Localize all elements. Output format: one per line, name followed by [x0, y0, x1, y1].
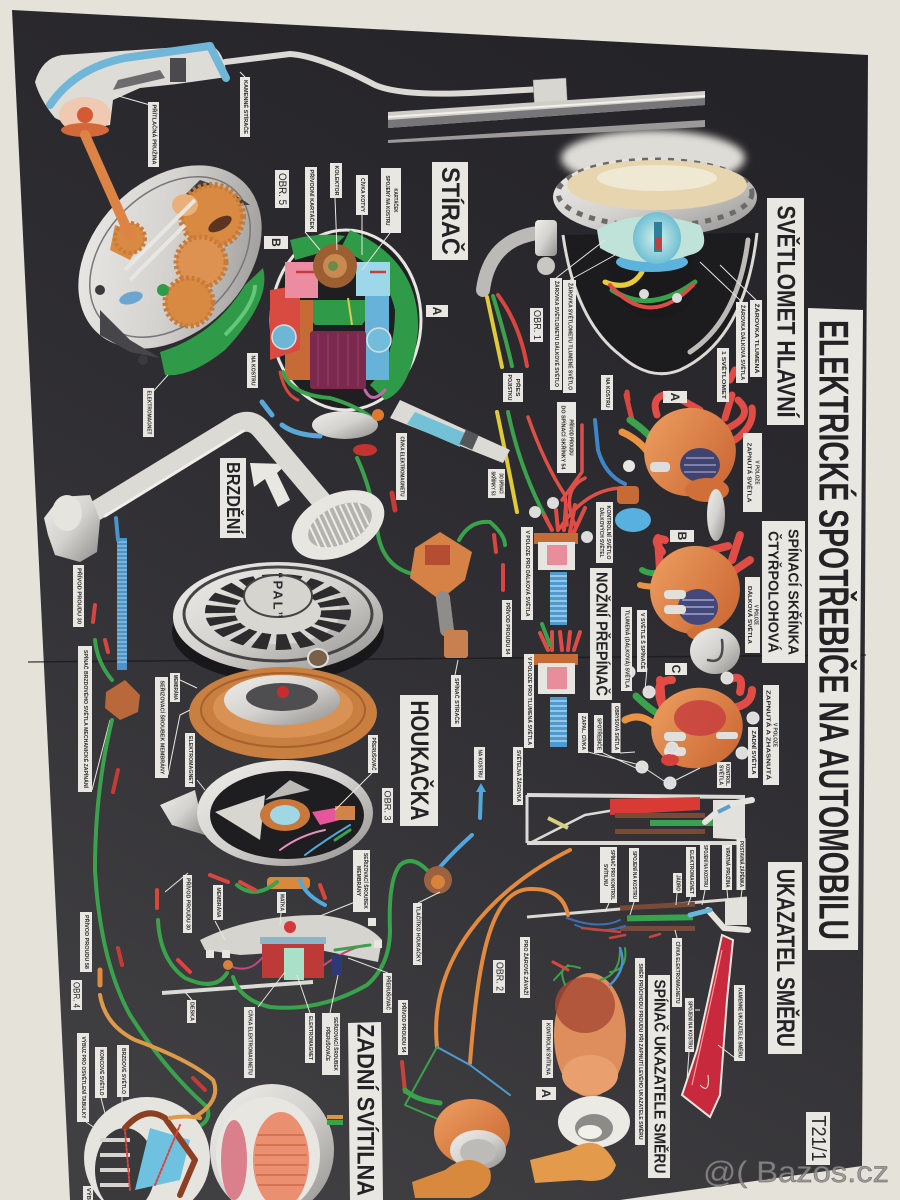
label: přívod proudu [557, 402, 576, 473]
label: tlumená: TLUMENÁ (DÁLKOVÁ) SVĚTLA [624, 610, 632, 688]
label: přívod proudu 58 [80, 912, 92, 972]
heading: ukazatel směru: UKAZATEL SMĚRU [771, 869, 801, 1047]
wiper blade and rod [225, 54, 705, 143]
horn cover: “PAL” [270, 572, 286, 620]
label: obr 4: OBR. 4 [72, 982, 82, 1008]
heading: houkačka [400, 695, 438, 826]
label: přívod proudu: DO SPÍNACÍ SKŘÍNKY 54 [560, 406, 568, 470]
label: matka: MATKA [278, 894, 284, 911]
heading: stírač: STÍRAČ [436, 167, 466, 255]
label: přívod proudu 54: PŘÍVOD PROUDU 54 [504, 602, 512, 655]
label: kontrolní světlo dálkových světel: DÁLKOVÝCH SVĚTEL [598, 508, 606, 558]
label: na kostru: NA KOSTRU [604, 378, 610, 408]
label: koncové světlo: KONCOVÉ SVĚTLO [98, 1050, 106, 1096]
label: přívod proudu 54 [502, 600, 512, 657]
label: seřizovací šroubek 2: SEŘIZOVACÍ ŠROUBEK [362, 853, 370, 909]
label: tlumená [621, 607, 632, 691]
label: spotřebiče: SPOTŘEBIČE [596, 718, 604, 750]
label: spotřebiče [594, 715, 604, 753]
label: přívod proudu 30: PŘÍVOD PROUDU 30 [76, 568, 84, 624]
indicator lower view [527, 898, 748, 938]
label: v poloze pro dálková světla [521, 527, 533, 620]
label: cívka elektromagnetu: CÍVKA ELEKTROMAGNETU [398, 436, 406, 496]
label: v poloze zapnutá [763, 685, 779, 785]
panel: four-position switch box [578, 300, 805, 789]
horn cover [172, 562, 384, 682]
label: žárovka dálková [550, 278, 562, 390]
motor B gearbox [42, 129, 298, 385]
label: tag A [426, 305, 448, 317]
label: spojení na kostru 2 [629, 848, 639, 902]
heading: spínač ukazatele směru [648, 975, 670, 1178]
label: spínač pro kontrolní svítilnu: SVÍTILNU [602, 864, 610, 886]
label: koncové světlo [95, 1047, 107, 1098]
label: směr průchodu proudu [635, 958, 645, 1145]
label: spojení na kostru 3 [685, 998, 694, 1052]
label: kolektor [330, 163, 342, 198]
label: do spínací skříňky: DO SPÍNACÍ [498, 474, 506, 494]
label: cívka elektromagnetu 2 [244, 1007, 255, 1078]
label: na kostru: NA KOSTRU [250, 356, 256, 386]
label: vrtání závaží: PRO ŽÁROVÉ ZÁVAŽÍ [522, 940, 530, 995]
watermark: @( Bazos.cz [703, 1156, 889, 1189]
label: matka [277, 892, 286, 913]
label: směr průchodu proudu: SMĚR PRŮCHODU PROUDU PŘI ZAPNUTÍ LEVÉHO UKAZATELE SMĚRU [637, 964, 645, 1140]
label: switch C tag: C [669, 665, 683, 674]
label: přes pojistku: POJISTKU [506, 374, 512, 400]
label: spínač stírače: SPÍNAČ STÍRAČE [453, 678, 461, 724]
switch callouts [588, 666, 759, 789]
label: tag A: A [430, 307, 444, 316]
label: výbuz pro osvětlení tabulky: VÝBUZ PRO OSVĚTLENÍ TABULKY [80, 1036, 88, 1119]
label: přítlačná pružina [148, 102, 159, 167]
label: kamenné ukazatele směru: KAMENNÉ UKAZATELE SMĚRU [736, 988, 744, 1058]
label: membrána 2 [213, 885, 223, 920]
switch lower [529, 497, 593, 747]
label: přívod proudu: PŘÍVOD PROUDU [568, 420, 576, 456]
panel: direction indicator switch [402, 850, 670, 1198]
rear lamp open view [84, 1097, 210, 1200]
label: membrána: MEMBRÁNA [172, 675, 179, 700]
spring and brake switch [93, 518, 140, 720]
label: seřizovací šroubek membrány [155, 677, 168, 778]
label: spojení na kostru 3: SPOJENÍ NA KOSTRU [686, 1001, 694, 1049]
heading: spínací skříňka [762, 521, 805, 663]
label: na kostru [474, 747, 485, 780]
switch A [622, 370, 752, 541]
label: kontrolní světlo dálkových světel: KONTROLNÍ SVĚTLO [605, 506, 613, 560]
label: v poloze pro dálková světla: V POLOZE PRO DÁLKOVÁ SVĚTLA [524, 530, 532, 616]
heading: brzdění: BRZDĚNÍ [223, 462, 244, 535]
label: cívka elektromagnetu 2: CÍVKA ELEKTROMAGNETU [246, 1010, 254, 1075]
label: zadní světla [748, 727, 758, 778]
label: zadní světla: ZADNÍ SVĚTLA [750, 731, 758, 774]
heading: spínací skříňka: ČTYŘPOLOHOVÁ [764, 531, 782, 653]
label: kartáček spojený na kostru: SPOJENÝ NA KOSTRU [384, 176, 391, 226]
label: kamenné ukazatele směru [734, 985, 745, 1061]
label: elektromagnet: ELEKTROMAGNET [688, 850, 694, 894]
red indicator arm [682, 935, 733, 1117]
label: elektromagnet [143, 388, 154, 437]
label: vratná pružina: VRATNÁ PRUŽINA [724, 848, 732, 888]
label: kontrolní světlo dálkových světel [596, 502, 613, 563]
label: spojení na kostru [700, 842, 710, 890]
label: obr 2: OBR. 2 [494, 962, 504, 991]
label: brzdové světlo [117, 1045, 129, 1097]
label: seřizovací šroubek 2 [353, 850, 370, 912]
label: na kostru [601, 375, 613, 410]
label: žárovka tlumená: ŽÁROVKA SVĚTLOMETU TLUMENÉ SVĚTLO [566, 283, 574, 391]
label: do spínací skříňky [488, 469, 506, 498]
label: přívod proudu 30: PŘÍVOD PROUDU 30 [184, 878, 192, 930]
rear lamp wiring [95, 720, 215, 1127]
orange wires [402, 850, 570, 1120]
label: přerušovač: PŘERUŠOVAČ [370, 738, 378, 770]
label: 1 dálkové [717, 348, 729, 402]
horn ring [160, 760, 373, 866]
heading: nožní přepínač: NOŽNÍ PŘEPÍNAČ [592, 572, 612, 696]
label: zapal. cívka: ZAPAL. CÍVKA [580, 716, 588, 750]
label: tlumená světla [736, 302, 748, 383]
label: přes pojistku: PŘES [514, 378, 522, 397]
label: postavná zápěnka [736, 838, 746, 890]
label: žárovka dálková: ŽÁROVKA SVĚTLOMETU DÁLKOVÉ SVĚTLO [553, 281, 561, 388]
label: světelná žárovka: SVĚTELNÁ ŽÁROVKA [515, 750, 523, 802]
label: elektromagnet: ELEKTROMAGNET [187, 736, 193, 785]
label: přívod proudu 30 [183, 875, 192, 933]
label: přes pojistku [503, 373, 523, 402]
panel: braking [44, 422, 396, 792]
label: přerušovač [368, 735, 378, 773]
label: seřizovací šroubek membrány: SEŘIZOVACÍ ŠROUBEK MEMBRÁNY [158, 680, 166, 775]
orange diaphragm [189, 667, 377, 759]
arrow: brake direction [250, 463, 290, 507]
label: kontrolní světla: SVĚTLA [718, 765, 726, 785]
label: v poloze spínače: V SVĚTLE Š SPÍNAČE [639, 613, 647, 669]
horn wiring [157, 783, 486, 1008]
label: v poloze svěšené [743, 433, 762, 512]
label: kontrolní svítilna: KONTROLNÍ SVÍTILNA [544, 1023, 552, 1075]
large switch with lever [412, 1099, 510, 1198]
label: T21/1: T21/1 [807, 1116, 829, 1162]
label: výbuz small: VÝB [85, 1188, 92, 1200]
label: kartáček spojený na kostru [381, 168, 401, 233]
label: spínač pro kontrolní svítilnu [600, 847, 617, 903]
label: v poloze svěšené: ZAPNUTÁ SVĚTLA [746, 442, 754, 502]
switch C [625, 678, 752, 777]
label: kontrolní svítilna [542, 1020, 553, 1078]
label: vrtání závaží [520, 937, 530, 998]
main title [808, 308, 863, 950]
label: switch A tag: A [668, 393, 682, 402]
label: v poloze dálková [745, 577, 760, 653]
panel: wiper [35, 45, 705, 727]
heading: ukazatel směru [768, 862, 802, 1054]
label: spínač brzdového světla: SPÍNAČ BRZDOVÉHO SVĚTLA MECHANICKÉ ZAPÍNÁNÍ [82, 650, 90, 788]
wiper arm head [35, 45, 227, 137]
label: v poloze dálková: V POLOZE [752, 605, 758, 625]
label: tag A [536, 1087, 556, 1100]
conduit and wires [483, 220, 651, 532]
label: elektromagnet [686, 847, 696, 897]
label: žárovka [750, 300, 762, 377]
switch upper [534, 505, 585, 625]
label: spojení na kostru: SPOJENÍ NA KOSTRU [702, 845, 710, 887]
label: cívka elektromagnetu [672, 938, 682, 1007]
leader lines [556, 240, 756, 302]
label: výbuz pro osvětlení tabulky [77, 1033, 89, 1122]
label: kontrolní světla [717, 762, 731, 788]
label: v poloze pro tlumená světla [524, 654, 534, 748]
label: seřizovací šroubek 2: MEMBRÁNY [355, 866, 362, 896]
label: přívod proudu 58: PŘÍVOD PROUDU 58 [83, 915, 91, 969]
label: přerušovač 2 [383, 973, 392, 1013]
heading: houkačka: HOUKAČKA [405, 700, 435, 820]
label: switch A tag [663, 391, 687, 403]
label: spínač pro kontrolní svítilnu: SPÍNAČ PRO KONTROL [609, 850, 617, 900]
label: v poloze spínače [637, 610, 647, 672]
label: přerušovač 2: PŘERUŠOVAČ [384, 976, 392, 1010]
label: kamenné stírače [240, 77, 250, 137]
label: tlačítko houkačky: TLAČÍTKO HOUKAČKY [414, 906, 422, 962]
headlight body illustration [553, 130, 757, 374]
heading: spínač ukazatele směru: SPÍNAČ UKAZATELE SMĚRU [650, 980, 670, 1174]
label: v poloze svěšené: V POLOZE [754, 460, 760, 485]
label: spojení na kostru 2: SPOJENÍ NA KOSTRU [631, 851, 639, 899]
label: obrysová světla [612, 703, 621, 753]
label: zapal. cívka [578, 713, 588, 753]
label: brzdové světlo: BRZDOVÉ SVĚTLO [120, 1048, 128, 1095]
label: v poloze zapnutá: V POLOZE [772, 723, 778, 747]
label: kamenné stírače: KAMENNÉ STÍRAČE [242, 80, 250, 134]
horn side section [162, 877, 382, 993]
switch B [640, 535, 750, 674]
panel: direction indicator [527, 795, 830, 1165]
label: elektromagnet 2 [305, 1013, 315, 1063]
brake pedal [44, 422, 396, 574]
label: žárovka: ŽÁROVKA TLUMENÁ [753, 304, 761, 374]
panel: horn [155, 562, 486, 1078]
label: kartáček spojený na kostru: KARTÁČEK [392, 188, 399, 212]
rear lamp callouts [86, 1097, 122, 1130]
fold line [28, 655, 866, 662]
panel: rear lamp [71, 720, 383, 1200]
switch body A [530, 948, 630, 1183]
label: cívka elektromagnetu [396, 433, 407, 500]
wiper callout lines [115, 72, 458, 675]
label: postavná zápěnka: POSTAVNÁ ZÁPĚNKA [738, 841, 746, 887]
label: přívod proudu 54: PŘÍVOD PROUDU 54 [400, 1002, 408, 1053]
label: tlačítko houkačky [413, 903, 422, 965]
label: jádro [673, 873, 682, 893]
label: cívka kotvy [356, 175, 368, 215]
label: obr 5: OBR. 5 [276, 173, 288, 205]
label: elektromagnet 2: ELEKTROMAGNET [307, 1016, 313, 1060]
label: seřizovací šroubek přerušovače: PŘERUŠOVAČE [324, 1027, 332, 1061]
label: kontrolní světla: KONTROL. [724, 764, 730, 786]
wiper switch with green lead [357, 458, 505, 658]
label: tag A: A [539, 1089, 553, 1098]
label: jádro: JÁDRO [674, 875, 682, 892]
leader line [92, 720, 110, 790]
heading: hlavní světlomet: SVĚTLOMET HLAVNÍ [772, 206, 802, 418]
label: deska: DESKA [188, 1002, 194, 1021]
horn callout lines [165, 680, 440, 1013]
label: na kostru [247, 353, 258, 388]
label: přívodní kartáček: PŘÍVODNÍ KARTÁČEK [308, 170, 316, 230]
label: kolektor: KOLEKTOR [333, 166, 339, 196]
label: membrána [170, 673, 180, 702]
label: switch B tag: B [675, 532, 689, 541]
label: tag B: B [269, 238, 283, 247]
label: elektromagnet [185, 733, 195, 787]
indicator leader lines [605, 890, 742, 1080]
label: obr 3: OBR. 3 [382, 790, 392, 820]
panel: headlight [483, 130, 804, 532]
label: v poloze dálková: DÁLKOVÁ SVĚTLA [746, 586, 754, 644]
label: tag B [264, 236, 288, 249]
label: membrána 2: MEMBRÁNA [215, 888, 222, 918]
label: seřizovací šroubek přerušovače: SEŘIZOVACÍ ŠROUBEK [332, 1017, 340, 1071]
label: spínač brzdového světla [78, 646, 92, 792]
label: switch B tag [670, 530, 694, 542]
label: přívod proudu 54 [398, 1000, 408, 1055]
label: cívka kotvy: CÍVKA KOTVY [359, 178, 367, 212]
label: tlumená světla: ŽÁROVKA DÁLKOVÁ SVĚTLA [739, 305, 747, 380]
label: výbuz small [83, 1186, 93, 1200]
heading: spínací skříňka: SPÍNACÍ SKŘÍNKA [784, 529, 802, 655]
label: v poloze zapnutá: ZAPNUTÁ A ZHASNUTÁ [764, 690, 772, 780]
label: světelná žárovka [513, 747, 523, 805]
rear lamp lens [210, 1084, 343, 1200]
orange drive rod [85, 135, 130, 236]
label: přívodní kartáček [305, 167, 317, 232]
label: obr 1: OBR. 1 [531, 310, 542, 340]
label: přívod proudu 30 [73, 565, 84, 627]
label: do spínací skříňky: SKŘÍNKY 53 [490, 472, 498, 496]
label: switch C tag [665, 663, 687, 675]
label: obrysová světla: OBRYSOVÁ SVĚTLA [613, 706, 621, 750]
label: 1 dálkové: 1 SVĚTLOMET [720, 351, 728, 400]
label: na kostru: NA KOSTRU [476, 750, 482, 778]
label: spínač stírače [451, 675, 461, 727]
label: elektromagnet: ELEKTROMAGNET [146, 390, 152, 435]
label: žárovka tlumená [563, 280, 576, 393]
label: seřizovací šroubek přerušovače [322, 1013, 340, 1075]
indicator upper view [527, 795, 752, 843]
heading: hlavní světlomet [767, 198, 804, 425]
label: deska [187, 1000, 196, 1023]
label: vratná pružina [722, 845, 732, 890]
label: v poloze pro tlumená světla: V POLOZE PRO TLUMENÁ SVĚTLA [526, 657, 534, 745]
label: přítlačná pružina: PŘÍTLAČNÁ PRUŽINA [150, 104, 158, 164]
label: cívka elektromagnetu: CÍVKA ELEKTROMAGNETU [674, 942, 682, 1004]
panel: foot switch [513, 497, 613, 805]
motor A [262, 230, 510, 463]
